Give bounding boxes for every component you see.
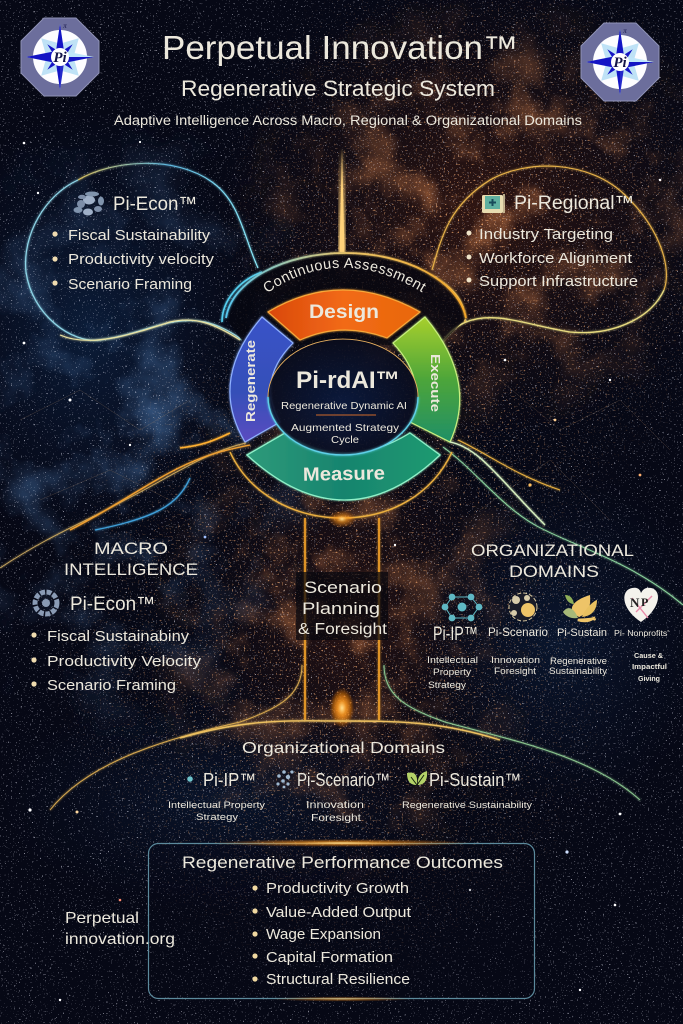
- bullet list: Productivity Growth: [266, 880, 409, 897]
- icon: Pi-Nonprofits heart: P: [641, 595, 648, 609]
- icon: Pi-Nonprofits heart: N: [630, 595, 640, 610]
- bullet list: Industry Targeting: [479, 226, 613, 243]
- title block: Regenerative Strategic System: [181, 76, 495, 101]
- labels: product names: Pi-Scenario: [488, 627, 548, 639]
- labels: product names: [433, 624, 670, 645]
- labels: product names: Pi- Nonprofits': [614, 629, 670, 638]
- bullet list: [466, 226, 638, 290]
- section: organizational domains heading: DOMAINS: [509, 562, 599, 581]
- icon: Pi-IP hexagon network: [442, 594, 482, 621]
- item: Pi-Scenario: [276, 770, 390, 824]
- website label: Perpetual: [65, 910, 139, 927]
- labels: descriptions: Foresight: [494, 666, 537, 676]
- center core: Augmented Strategy: [291, 422, 400, 434]
- labels: descriptions: Innovation: [491, 655, 540, 665]
- item: Pi-Scenario: Foresight: [311, 813, 361, 824]
- bullet list: [31, 628, 202, 694]
- labels: descriptions: Strategy: [428, 680, 467, 690]
- labels: descriptions: Sustainability: [549, 666, 608, 676]
- title block: Adaptive Intelligence Across Macro, Regional & Organizational Domains: [114, 113, 582, 128]
- icon: Pi-Scenario globe: [509, 593, 537, 621]
- connectors: flow lines from wheel: [0, 433, 683, 605]
- website label: [65, 910, 175, 948]
- panel: organizational domain columns: [427, 588, 670, 690]
- arc: lower dome: [50, 665, 640, 810]
- heading: Pi-Econ™: [113, 194, 197, 215]
- bullet list: Productivity Velocity: [47, 653, 202, 670]
- bullet list: Workforce Alignment: [479, 250, 633, 267]
- website label: innovation.org: [65, 931, 175, 948]
- heading: Pi-Regional™: [514, 193, 634, 214]
- heading: Pi-Econ™: [70, 594, 155, 615]
- item: Pi-Sustain: Regenerative Sustainability: [402, 800, 532, 811]
- panel: scenario planning label: [296, 572, 388, 640]
- segment: Design: Design: [309, 302, 379, 323]
- panel: Pi-Econ lower: [31, 592, 202, 694]
- logo: right compass: Pi: [613, 55, 627, 71]
- icon: Pi-Sustain leaves: [563, 595, 597, 621]
- segment: Measure: Measure: [303, 463, 385, 486]
- icon: pi-econ ring: [35, 592, 57, 614]
- panel: scenario planning label: Scenario: [304, 578, 382, 597]
- panel: regenerative performance outcomes: [148, 839, 534, 1002]
- bullet list: Fiscal Sustainabiny: [47, 628, 190, 645]
- center core: Pi-rdAI™: [296, 367, 400, 394]
- panel: bottom organizational domains: [168, 740, 532, 824]
- segment: Execute: Execute: [428, 354, 443, 412]
- top beam: [340, 148, 344, 252]
- logo: left compass: [21, 18, 99, 96]
- pillars: vertical channels: [305, 505, 379, 728]
- logo: right compass: π: [623, 27, 627, 35]
- bullet list: Wage Expansion: [266, 926, 381, 943]
- logo: left compass: Pi: [53, 50, 67, 66]
- segment: Regenerate: [230, 317, 293, 442]
- heading: Regenerative Performance Outcomes: [182, 853, 503, 872]
- panel: scenario planning label: Planning: [302, 599, 380, 618]
- ring: continuous assessment band: [224, 250, 468, 345]
- panel: scenario planning label: & Foresight: [298, 621, 388, 638]
- labels: product names: Pi-Sustain: [557, 627, 607, 639]
- labels: descriptions: Intellectual: [427, 655, 478, 665]
- divider: horizontal gold line: [8, 583, 683, 585]
- bullet list: [52, 227, 215, 293]
- item: Pi-IP: [168, 770, 265, 823]
- segment: Measure: [247, 433, 440, 500]
- section: organizational domains heading: ORGANIZATIONAL: [471, 541, 634, 560]
- section: macro intelligence heading: MACRO: [94, 539, 168, 558]
- labels: descriptions: [427, 651, 667, 690]
- bullet list: Scenario Framing: [68, 276, 192, 293]
- title block: [114, 29, 582, 128]
- icon: Pi-Nonprofits heart: [624, 588, 658, 622]
- section: organizational domains heading: [471, 541, 634, 581]
- bullet list: [252, 880, 412, 988]
- labels: descriptions: Giving: [638, 674, 660, 683]
- segment: Design: [268, 290, 420, 340]
- item: Pi-Sustain: Pi-Sustain™: [429, 770, 521, 790]
- center core: Cycle: [331, 434, 359, 446]
- icon: pi-econ cluster: [74, 192, 104, 216]
- bullet list: Scenario Framing: [47, 677, 176, 694]
- item: Pi-IP: Intellectual Property: [168, 800, 265, 811]
- labels: product names: Pi-IP™: [433, 624, 478, 645]
- center core: [268, 339, 418, 455]
- labels: descriptions: Impactful: [632, 662, 667, 671]
- labels: descriptions: Cause &: [634, 651, 664, 660]
- logo: left compass: π: [63, 22, 67, 30]
- item: Pi-Scenario: Innovation: [306, 800, 364, 811]
- icon: regional document: [482, 194, 504, 213]
- bullet list: Productivity velocity: [68, 251, 215, 268]
- panel: Pi-Regional: [430, 166, 666, 342]
- heading: Organizational Domains: [242, 740, 445, 757]
- segment: Execute: [393, 317, 460, 442]
- labels: descriptions: Regenerative: [550, 656, 607, 666]
- labels: descriptions: Property: [433, 667, 472, 677]
- item: Pi-IP: Pi-IP™: [203, 770, 256, 790]
- panel: Pi-Econ upper: [26, 163, 262, 340]
- item: Pi-IP: Strategy: [196, 812, 238, 823]
- title block: Perpetual Innovation™: [162, 29, 518, 66]
- bullet list: Capital Formation: [266, 949, 393, 966]
- logo: right compass: [581, 23, 659, 101]
- segment: Regenerate: Regenerate: [243, 340, 258, 422]
- center core: Regenerative Dynamic AI: [281, 400, 407, 412]
- bullet list: Value-Added Output: [266, 904, 412, 921]
- section: macro intelligence heading: INTELLIGENCE: [64, 560, 198, 579]
- item: Pi-Scenario: Pi-Scenario™: [297, 770, 390, 790]
- bullet list: Support Infrastructure: [479, 273, 638, 290]
- item: Pi-Sustain: [402, 770, 532, 811]
- bullet list: Fiscal Sustainability: [68, 227, 211, 244]
- bullet list: Structural Resilience: [266, 971, 410, 988]
- section: macro intelligence heading: [64, 539, 198, 579]
- hub: strategy cycle wheel: [230, 290, 460, 500]
- ring: continuous assessment band: Continuous Assessment: [264, 258, 426, 292]
